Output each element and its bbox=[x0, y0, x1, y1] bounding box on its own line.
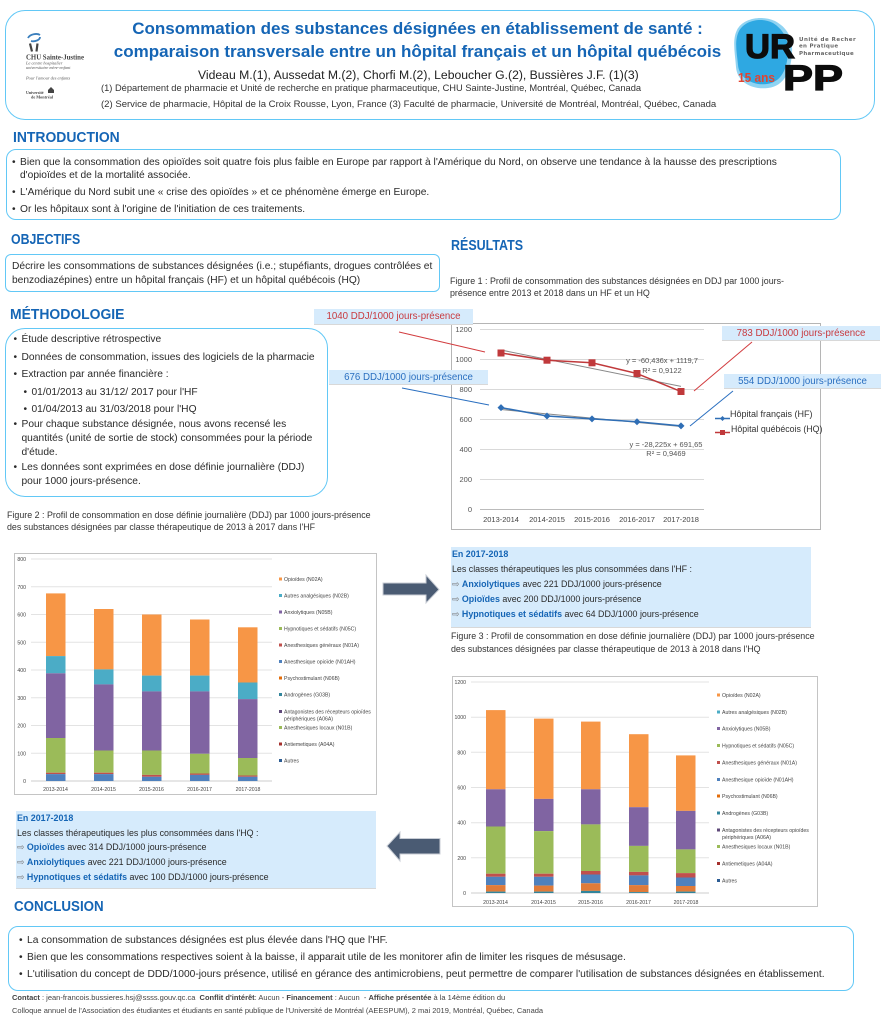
line chart: figure 1: Hôpital français (HF) bbox=[730, 409, 813, 419]
stacked bar chart: figure 3: 800 bbox=[457, 750, 466, 756]
logo: CHU Sainte-Justine: CHU Sainte-Justine bbox=[26, 54, 84, 62]
text: méthodologie bullets: • bbox=[14, 419, 17, 430]
callout: 1040: 1040 DDJ/1000 jours-présence bbox=[326, 311, 461, 322]
arrow: right bbox=[382, 574, 440, 604]
footer: contact: Contact : jean-francois.bussieres.hsj@ssss.gouv.qc.ca Conflit d'intérêt: Aucun - Financement : Aucun - Affiche présentée à la 14ème édition du bbox=[12, 993, 505, 1002]
text: HF callout: ⇨ Anxiolytiques avec 221 DDJ/1000 jours-présence bbox=[452, 578, 662, 588]
stacked bar chart: figure 3: Anxiolytiques (N05B) bbox=[722, 726, 771, 732]
stacked bar chart: figure 2: 300 bbox=[17, 696, 26, 702]
text: méthodologie bullets: d'étude. bbox=[22, 447, 58, 458]
stacked bar chart: figure 2: 2017-2018 bbox=[236, 787, 261, 793]
callout: 554 bbox=[724, 374, 881, 389]
logo: CHU Sainte-Justine: Université bbox=[26, 90, 44, 95]
stacked bar chart: figure 2: périphériques (A06A) bbox=[284, 716, 333, 722]
stacked bar chart: figure 2: Androgènes (G03B) bbox=[284, 692, 330, 698]
logo: CHU Sainte-Justine: Pour l'amour des enfants bbox=[25, 76, 71, 80]
stacked bar chart: figure 2: 500 bbox=[17, 640, 26, 646]
stacked bar chart: figure 2: 2016-2017 bbox=[187, 787, 212, 793]
text: HF callout bbox=[452, 548, 699, 619]
stacked bar chart: figure 2: 2015-2016 bbox=[139, 787, 164, 793]
line chart: figure 1: 600 bbox=[459, 415, 472, 424]
text: objectifs bbox=[12, 261, 432, 286]
text: méthodologie bullets: Les données sont exprimées en dose définie journalière (DDJ) bbox=[22, 462, 304, 473]
stacked bar chart: figure 3: Anesthesique opioïde (N01AH) bbox=[722, 778, 794, 784]
heading: objectifs: OBJECTIFS bbox=[11, 232, 80, 248]
callout: 1040 bbox=[314, 309, 473, 325]
callout: 676 bbox=[329, 370, 488, 385]
logo: CHU Sainte-Justine bbox=[25, 33, 84, 100]
text: HF callout: Les classes thérapeutiques les plus consommées dans l'HF : bbox=[452, 564, 692, 574]
logo: URPP: UR bbox=[745, 28, 795, 66]
text: objectifs: benzodiazépines) entre un hôpital français (HF) et un hôpital québécois (HQ) bbox=[12, 275, 360, 286]
caption: figure 2 bbox=[7, 510, 371, 532]
stacked bar chart: figure 2: Autres analgésiques (N02B) bbox=[284, 594, 349, 600]
stacked bar chart: figure 3: 1200 bbox=[454, 680, 466, 686]
text: HQ callout bbox=[17, 813, 269, 882]
text: introduction bullets bbox=[12, 157, 777, 215]
footer: contact: Colloque annuel de l'Association des étudiantes et étudiants en santé publique de l'Université de Montréal (AEESPUM), 2 mai 2019, Montréal, Québec, Canada bbox=[12, 1006, 543, 1014]
logo: URPP: 15 ans bbox=[738, 70, 775, 85]
stacked bar chart: figure 3: périphériques (A06A) bbox=[722, 835, 771, 841]
stacked bar chart: figure 2: 2014-2015 bbox=[91, 787, 116, 793]
footer: contact bbox=[12, 993, 544, 1014]
callout: 783 bbox=[722, 326, 880, 341]
stacked bar chart: figure 2: Opioïdes (N02A) bbox=[284, 577, 323, 583]
stacked bar chart: figure 3: 400 bbox=[457, 821, 466, 827]
text: méthodologie bullets: Étude descriptive rétrospective bbox=[22, 334, 161, 345]
text: introduction bullets: L'Amérique du Nord subit une « crise des opioïdes » et ce phénomène émerge en Europe. bbox=[20, 187, 429, 198]
text: introduction bullets: d'opioïdes et de la mortalité associée. bbox=[20, 170, 191, 181]
stacked bar chart: figure 3 bbox=[452, 676, 818, 907]
callout: 676: 676 DDJ/1000 jours-présence bbox=[344, 372, 473, 383]
caption: figure 3: des substances désignées par classe thérapeutique de 2013 à 2018 dans l'HQ bbox=[451, 644, 761, 654]
text: introduction bullets: Or les hôpitaux sont à l'origine de l'initiation de ces traitements. bbox=[20, 204, 305, 215]
stacked bar chart: figure 2: 800 bbox=[17, 557, 26, 563]
text: HQ callout: ⇨ Anxiolytiques avec 221 DDJ/1000 jours-présence bbox=[17, 857, 227, 867]
line chart: figure 1: 800 bbox=[459, 385, 472, 394]
text: méthodologie bullets: • bbox=[14, 334, 17, 345]
arrow: left bbox=[386, 831, 440, 862]
text: méthodologie bullets: • bbox=[24, 404, 27, 415]
callout: HF top classes bbox=[451, 547, 811, 628]
text: conclusion bullets: Bien que les consommations respectives soient à la baisse, il apparait utile de les monitorer afin de limiter les risques de mésusage. bbox=[27, 952, 626, 963]
line chart: figure 1: 2017-2018 bbox=[663, 515, 699, 524]
text: conclusion bullets: La consommation de substances désignées est plus élevée dans l'HQ que l'HF. bbox=[27, 935, 388, 946]
text: HF callout: ⇨ Hypnotiques et sédatifs avec 64 DDJ/1000 jours-présence bbox=[452, 608, 699, 618]
heading: introduction: INTRODUCTION bbox=[13, 130, 120, 146]
text: HQ callout: En 2017-2018 bbox=[17, 813, 73, 823]
heading: résultats: RÉSULTATS bbox=[451, 238, 523, 254]
logo: URPP bbox=[734, 18, 856, 98]
text: introduction bullets: Bien que la consommation des opioïdes soit quatre fois plus faible en Europe par rapport à l'Amérique du Nord, on observe une tendance à la hausse des prescriptions bbox=[20, 157, 777, 168]
affiliations: (2) Service de pharmacie, Hôpital de la Croix Rousse, Lyon, France (3) Faculté de pharmacie, Université de Montréal, Montréal, Québec, Canada bbox=[101, 99, 716, 110]
stacked bar chart: figure 2: Anesthesique opioïde (N01AH) bbox=[284, 660, 356, 666]
stacked bar chart: figure 3: 200 bbox=[457, 856, 466, 862]
line chart: figure 1: R² = 0,9122 bbox=[642, 366, 682, 375]
authors: Videau M.(1), Aussedat M.(2), Chorfi M.(2), Leboucher G.(2), Bussières J.F. (1)(3) bbox=[198, 68, 639, 82]
line chart: figure 1: 1000 bbox=[455, 355, 472, 364]
caption: figure 1: Figure 1 : Profil de consommation des substances désignées en DDJ par 1000 jours- bbox=[450, 276, 784, 286]
text: méthodologie bullets: pour 1000 jours-présence. bbox=[22, 476, 141, 487]
title: Consommation des substances désignées en établissement de santé : bbox=[132, 19, 703, 38]
text: HF callout: En 2017-2018 bbox=[452, 548, 508, 558]
logo: CHU Sainte-Justine: Le centre hospitalier bbox=[25, 60, 63, 66]
stacked bar chart: figure 2: Anesthesiques généraux (N01A) bbox=[284, 643, 359, 649]
stacked bar chart: figure 3: 1000 bbox=[454, 715, 466, 721]
logo: URPP: Pharmaceutique bbox=[799, 51, 854, 57]
callout: 554: 554 DDJ/1000 jours-présence bbox=[738, 376, 867, 387]
line chart: figure 1: y = -60,436x + 1119,7 bbox=[626, 356, 698, 365]
stacked bar chart: figure 2: 100 bbox=[17, 751, 26, 757]
stacked bar chart: figure 3: Psychostimulant (N06B) bbox=[722, 794, 778, 800]
line chart: figure 1: R² = 0,9469 bbox=[646, 449, 686, 458]
text: HQ callout: Les classes thérapeutiques les plus consommées dans l'HQ : bbox=[17, 828, 258, 838]
stacked bar chart: figure 3: 2015-2016 bbox=[578, 900, 603, 906]
stacked bar chart: figure 2: Antagonistes des récepteurs opioïdes bbox=[284, 710, 371, 716]
stacked bar chart: figure 2: Autres bbox=[284, 758, 299, 764]
arrows: leader lines bbox=[398, 332, 752, 426]
stacked bar chart: figure 3: Hypnotiques et sédatifs (N05C) bbox=[722, 744, 794, 750]
stacked bar chart: figure 2: 400 bbox=[17, 668, 26, 674]
logo: URPP: en Pratique bbox=[799, 44, 838, 50]
stacked bar chart: figure 2: Psychostimulant (N06B) bbox=[284, 676, 340, 682]
line chart: figure 1: 2013-2014 bbox=[483, 515, 519, 524]
caption: figure 1 bbox=[450, 276, 784, 298]
stacked bar chart: figure 3: 600 bbox=[457, 786, 466, 792]
text: introduction bullets: • bbox=[12, 204, 16, 215]
line chart: figure 1: 200 bbox=[459, 475, 472, 484]
panel: header bbox=[5, 10, 875, 120]
text: méthodologie bullets bbox=[14, 333, 315, 487]
line chart: figure 1 bbox=[451, 323, 823, 530]
caption: figure 2: des substances désignées par classe thérapeutique de 2013 à 2017 dans l'HF bbox=[7, 522, 315, 532]
callout: 783: 783 DDJ/1000 jours-présence bbox=[737, 328, 865, 339]
affiliations bbox=[101, 83, 716, 110]
title: comparaison transversale entre un hôpital français et un hôpital québécois bbox=[114, 42, 721, 60]
logo: URPP: PP bbox=[783, 59, 843, 98]
line chart: figure 1: 0 bbox=[468, 505, 472, 514]
stacked bar chart: figure 2: 2013-2014 bbox=[43, 787, 68, 793]
stacked bar chart: figure 3: Antiemetiques (A04A) bbox=[722, 862, 773, 868]
stacked bar chart: figure 3: Antagonistes des récepteurs opioïdes bbox=[722, 828, 809, 834]
logo: URPP: Unité de Recher bbox=[799, 36, 856, 43]
heading: conclusion: CONCLUSION bbox=[14, 899, 104, 915]
stacked bar chart: figure 3: 2014-2015 bbox=[531, 900, 556, 906]
line chart: figure 1: 1200 bbox=[455, 325, 472, 334]
text: conclusion bullets: L'utilisation du concept de DDD/1000-jours présence, utilisé en gérance des antimicrobiens, peut permettre de comparer l'utilisation de substances désignées en établissement. bbox=[27, 969, 825, 980]
title bbox=[114, 19, 721, 60]
caption: figure 3: Figure 3 : Profil de consommation en dose définie journalière (DDJ) par 1000 jours-présence bbox=[451, 631, 815, 641]
text: HQ callout: ⇨ Hypnotiques et sédatifs avec 100 DDJ/1000 jours-présence bbox=[17, 872, 269, 882]
panel: conclusion bbox=[8, 926, 854, 991]
stacked bar chart: figure 2: 700 bbox=[17, 585, 26, 591]
line chart: figure 1: 2014-2015 bbox=[529, 515, 565, 524]
caption: figure 3 bbox=[451, 631, 815, 654]
logo: CHU Sainte-Justine: universitaire mère-enfant bbox=[26, 65, 71, 70]
text: HF callout: ⇨ Opioïdes avec 200 DDJ/1000 jours-présence bbox=[452, 594, 641, 604]
stacked bar chart: figure 3: Opioïdes (N02A) bbox=[722, 693, 761, 699]
text: conclusion bullets bbox=[19, 935, 825, 980]
text: méthodologie bullets: • bbox=[24, 386, 27, 398]
text: HQ callout: ⇨ Opioïdes avec 314 DDJ/1000 jours-présence bbox=[17, 842, 206, 852]
stacked bar chart: figure 3: 2016-2017 bbox=[626, 900, 651, 906]
text: méthodologie bullets: • bbox=[14, 352, 17, 362]
text: objectifs: Décrire les consommations de substances désignées (i.e.; stupéfiants, drogues contrôlées et bbox=[12, 261, 432, 272]
panel: objectifs bbox=[5, 254, 440, 292]
panel: introduction bbox=[6, 149, 841, 220]
text: conclusion bullets: • bbox=[19, 935, 23, 946]
text: méthodologie bullets: Extraction par année financière : bbox=[22, 369, 169, 380]
stacked bar chart: figure 2: Antiemetiques (A04A) bbox=[284, 742, 335, 748]
stacked bar chart: figure 2: Hypnotiques et sédatifs (N05C) bbox=[284, 626, 356, 632]
text: méthodologie bullets: 01/01/2013 au 31/12/ 2017 pour l'HF bbox=[32, 386, 198, 398]
stacked bar chart: figure 3: Anesthesiques locaux (N01B) bbox=[722, 844, 791, 850]
logo: CHU Sainte-Justine: de Montréal bbox=[31, 94, 54, 100]
text: introduction bullets: • bbox=[12, 187, 16, 198]
stacked bar chart: figure 3: 0 bbox=[463, 891, 466, 897]
text: méthodologie bullets: • bbox=[14, 369, 17, 380]
caption: figure 2: Figure 2 : Profil de consommation en dose définie journalière (DDJ) par 1000 jours-présence bbox=[7, 510, 371, 520]
line chart: figure 1: 400 bbox=[459, 445, 472, 454]
stacked bar chart: figure 2: 0 bbox=[23, 779, 26, 785]
text: méthodologie bullets: Données de consommation, issues des logiciels de la pharmacie bbox=[22, 352, 315, 362]
text: méthodologie bullets: Pour chaque substance désignée, nous avons recensé les bbox=[22, 419, 286, 430]
stacked bar chart: figure 3: Anesthesiques généraux (N01A) bbox=[722, 760, 797, 766]
affiliations: (1) Département de pharmacie et Unité de recherche en pratique pharmaceutique, CHU Sainte-Justine, Montréal, Québec, Canada bbox=[101, 83, 641, 93]
stacked bar chart: figure 3: Androgènes (G03B) bbox=[722, 811, 768, 817]
stacked bar chart: figure 3: 2013-2014 bbox=[483, 900, 508, 906]
stacked bar chart: figure 2 bbox=[14, 553, 377, 795]
stacked bar chart: figure 3: Autres bbox=[722, 878, 737, 884]
callout: HQ top classes bbox=[16, 811, 376, 889]
text: conclusion bullets: • bbox=[19, 969, 23, 980]
text: introduction bullets: • bbox=[12, 157, 16, 168]
stacked bar chart: figure 3: 2017-2018 bbox=[674, 900, 699, 906]
heading: méthodologie: MÉTHODOLOGIE bbox=[10, 307, 124, 323]
caption: figure 1: présence entre 2013 et 2018 dans un HF et un HQ bbox=[450, 288, 650, 298]
line chart: figure 1: 2015-2016 bbox=[574, 515, 610, 524]
panel: méthodologie bbox=[5, 328, 328, 497]
stacked bar chart: figure 2: Anesthesiques locaux (N01B) bbox=[284, 726, 353, 732]
line chart: figure 1: y = -28,225x + 691,65 bbox=[630, 440, 702, 449]
stacked bar chart: figure 2: 200 bbox=[17, 724, 26, 730]
stacked bar chart: figure 3: Autres analgésiques (N02B) bbox=[722, 710, 787, 716]
text: méthodologie bullets: • bbox=[14, 462, 17, 473]
stacked bar chart: figure 2: Anxiolytiques (N05B) bbox=[284, 610, 333, 616]
text: méthodologie bullets: 01/04/2013 au 31/03/2018 pour l'HQ bbox=[32, 404, 197, 415]
line chart: figure 1: Hôpital québécois (HQ) bbox=[731, 424, 823, 434]
line chart: figure 1: 2016-2017 bbox=[619, 515, 655, 524]
stacked bar chart: figure 2: 600 bbox=[17, 612, 26, 618]
text: conclusion bullets: • bbox=[19, 952, 23, 963]
text: méthodologie bullets: quantités (unité de sortie de stock) consommées pour la période bbox=[22, 433, 312, 444]
